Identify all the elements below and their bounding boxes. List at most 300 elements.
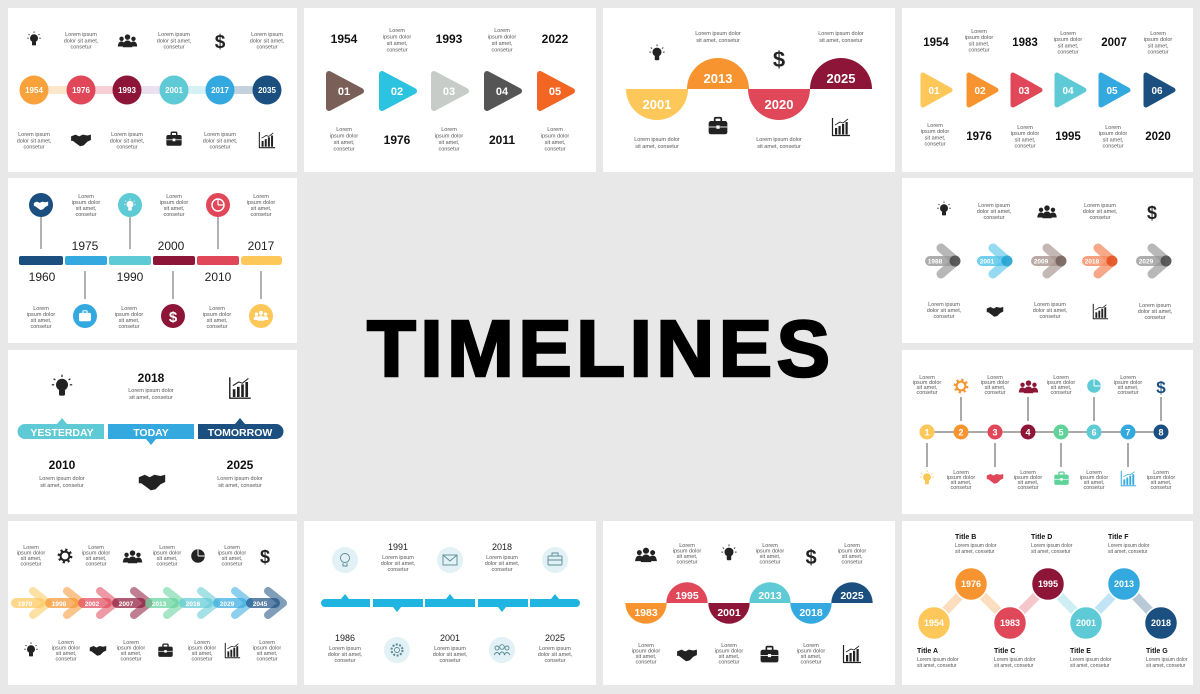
top texts: Lorem [844, 543, 860, 549]
bottom texts: consetur [1039, 314, 1061, 320]
panel: gray arrows 1988-2029: 2009 [1034, 258, 1049, 266]
years: 1954 [923, 37, 949, 49]
texts: sit amet, [207, 318, 228, 324]
bar labels: TODAY [133, 427, 169, 439]
panel: yesterday today tomorrow: 2018 [138, 371, 165, 385]
bottom titles: sit amet, consetur [917, 663, 957, 669]
texts: ipsum dolor [1054, 37, 1082, 43]
texts: sit amet, [1148, 43, 1169, 49]
bar [321, 594, 580, 612]
texts: Lorem ipsum dolor [695, 31, 741, 37]
top texts: consetur [916, 390, 938, 396]
year circles [20, 76, 282, 104]
circles: 2018 [1151, 618, 1171, 628]
panel: light blue line timeline: consetur [334, 658, 356, 664]
top texts: Lorem [679, 543, 695, 549]
top texts: ipsum dolor [82, 550, 110, 556]
texts [27, 194, 275, 330]
panel: chevron arrows 1970-2045: 2045 [253, 601, 268, 608]
texts: Lorem [33, 306, 49, 312]
circles: 1983 [1000, 618, 1020, 628]
texts: consetur [386, 48, 408, 54]
bottom texts: Lorem ipsum [111, 132, 143, 138]
top texts: Lorem ipsum [251, 32, 283, 38]
years: 1954 [331, 32, 358, 46]
texts: ipsum dolor [247, 200, 275, 206]
years: 2007 [1101, 37, 1127, 49]
panel: light blue line timeline [304, 521, 596, 685]
icon circles [332, 547, 568, 663]
texts: consetur [387, 567, 409, 573]
texts: ipsum dolor [330, 134, 358, 140]
panel: light blue line timeline: 1986 [335, 633, 355, 643]
bottom texts: consetur [23, 145, 45, 151]
texts: Lorem [971, 29, 987, 35]
arrows [33, 591, 283, 615]
years: 2020 [1145, 131, 1171, 143]
bottom texts: Lorem [58, 640, 74, 646]
bottom titles: Lorem ipsum dolor [1146, 657, 1188, 663]
texts: ipsum dolor [1144, 37, 1172, 43]
texts: Lorem [121, 306, 137, 312]
bottom titles: Lorem ipsum dolor [1070, 657, 1112, 663]
numbered circles: 5 [1058, 428, 1064, 438]
bottom texts: Lorem [1086, 470, 1102, 476]
bottom texts: dolor sit amet, [17, 138, 52, 144]
semicircles: 2020 [765, 97, 793, 112]
top texts: ipsum dolor [981, 380, 1009, 386]
panel: chevron arrows 1970-2045: 2016 [186, 601, 201, 608]
panel: chevron arrows 1970-2045: 2007 [119, 601, 134, 608]
year circles: 2035 [258, 86, 276, 95]
semicircles [625, 582, 873, 624]
panel: light blue line timeline: 2001 [440, 633, 460, 643]
panel: yesterday today tomorrow: 2025 [227, 458, 254, 472]
texts: Lorem [336, 127, 352, 133]
years [923, 37, 1171, 143]
circles: 2013 [1114, 579, 1134, 589]
bottom texts: consetur [635, 660, 657, 666]
top texts: sit amet, [1118, 385, 1139, 391]
bar labels: YESTERDAY [30, 427, 94, 439]
top texts: sit amet, [842, 554, 863, 560]
panel: yesterday today tomorrow: Lorem ipsum dolor [217, 476, 263, 482]
bottom texts: Lorem [123, 640, 139, 646]
top texts: consetur [1117, 390, 1139, 396]
bottom texts: consetur [1150, 485, 1172, 491]
texts: sit amet, consetur [696, 38, 740, 44]
top texts: consetur [20, 562, 42, 568]
bottom texts: dolor sit amet, [110, 138, 145, 144]
texts: sit amet, consetur [635, 144, 679, 150]
semicircles: 2013 [704, 71, 732, 86]
texts [921, 29, 1172, 150]
panel: triangles 01-05 [304, 8, 596, 172]
bottom texts [947, 470, 1175, 491]
panel: yesterday today tomorrow: Lorem ipsum dolor [128, 388, 174, 394]
bar segments [19, 256, 282, 265]
texts: sit amet, [387, 41, 408, 47]
texts: ipsum dolor [965, 35, 993, 41]
texts: sit amet, [492, 41, 513, 47]
bottom titles: Lorem ipsum dolor [994, 657, 1036, 663]
texts: sit amet, [76, 206, 97, 212]
bottom texts: Lorem [194, 640, 210, 646]
semicircles: 1995 [675, 590, 699, 602]
top texts: sit amet, [86, 556, 107, 562]
triangles: 03 [443, 86, 455, 98]
texts: Lorem [78, 194, 94, 200]
bottom titles: Title E [1070, 648, 1091, 655]
triangles [923, 75, 1173, 105]
semicircles: 2025 [827, 71, 855, 86]
texts: ipsum dolor [1011, 131, 1039, 137]
bottom titles: sit amet, consetur [994, 663, 1034, 669]
years: 1976 [966, 131, 992, 143]
texts [634, 31, 864, 150]
triangles: 05 [1106, 86, 1118, 97]
years: 2017 [248, 239, 275, 253]
texts: sit amet, consetur [757, 144, 801, 150]
top texts [913, 375, 1142, 396]
bottom texts: ipsum dolor [632, 648, 660, 654]
triangles: 03 [1018, 86, 1030, 97]
numbered circles: 7 [1125, 428, 1131, 438]
circles [918, 568, 1178, 640]
texts: ipsum dolor [383, 34, 411, 40]
bottom texts: sit amet, [1151, 480, 1172, 486]
texts: Lorem [1017, 125, 1033, 131]
top texts: ipsum dolor [756, 548, 784, 554]
top texts: Lorem [159, 545, 175, 551]
panel: yesterday today tomorrow: sit amet, consetur [218, 483, 262, 489]
top texts: consetur [163, 45, 185, 51]
bottom texts: consetur [933, 314, 955, 320]
semicircles: 2018 [799, 607, 823, 619]
top texts: Lorem ipsum [158, 32, 190, 38]
top texts: sit amet, [1051, 385, 1072, 391]
panel: wave 2001-2025 [603, 8, 895, 172]
numbered circles: 1 [924, 428, 930, 438]
top texts: sit amet, [21, 556, 42, 562]
connector bands [34, 86, 267, 94]
panel: gray arrows 1988-2029: 2001 [980, 258, 995, 266]
panel: chevron arrows 1970-2045: 2029 [220, 601, 235, 608]
texts: Lorem [494, 28, 510, 34]
top titles: Title B [955, 534, 976, 541]
bottom texts: ipsum dolor [1080, 475, 1108, 481]
texts [330, 28, 569, 152]
bottom icons [987, 304, 1108, 319]
texts: consetur [491, 567, 513, 573]
texts: ipsum dolor [921, 129, 949, 135]
bottom texts: ipsum dolor [947, 475, 975, 481]
connectors [927, 397, 1161, 467]
texts: sit amet, [925, 135, 946, 141]
bottom icons [24, 642, 240, 658]
top icons: $ [1147, 203, 1157, 223]
top texts: dolor sit amet, [64, 38, 99, 44]
bottom texts: sit amet, [121, 651, 142, 657]
bottom titles: Title C [994, 648, 1015, 655]
bottom texts: consetur [120, 656, 142, 662]
texts: consetur [924, 142, 946, 148]
panel: light blue line timeline: consetur [439, 658, 461, 664]
bottom texts: dolor sit amet, [927, 308, 962, 314]
panel: light blue line timeline: dolor sit amet, [433, 652, 468, 658]
top texts: ipsum dolor [913, 380, 941, 386]
texts: ipsum dolor [203, 312, 231, 318]
connectors [934, 584, 1161, 623]
years: 1990 [117, 270, 144, 284]
bottom icons [71, 132, 275, 148]
numbered circles: 8 [1158, 428, 1164, 438]
top icons: $ [215, 32, 226, 53]
bottom texts: Lorem [638, 643, 654, 649]
texts: dolor sit amet, [381, 561, 416, 567]
numbered circles: 4 [1025, 428, 1031, 438]
bottom titles: Lorem ipsum dolor [917, 657, 959, 663]
texts [381, 542, 520, 573]
top titles: Lorem ipsum dolor [1108, 543, 1150, 549]
semicircles: 1983 [634, 607, 658, 619]
bottom texts: sit amet, [951, 480, 972, 486]
top titles: Title F [1108, 534, 1129, 541]
texts: Lorem [253, 194, 269, 200]
top titles: sit amet, consetur [1031, 549, 1071, 555]
top texts: ipsum dolor [218, 550, 246, 556]
top icons: $ [260, 547, 270, 567]
texts: Lorem ipsum dolor [634, 137, 680, 143]
bottom texts: ipsum dolor [188, 646, 216, 652]
year circles: 1954 [25, 86, 43, 95]
panel: zigzag circles Title A-G [902, 521, 1193, 685]
top icons [59, 547, 270, 567]
top titles: sit amet, consetur [1108, 549, 1148, 555]
bottom texts: Lorem [1153, 470, 1169, 476]
texts: consetur [75, 212, 97, 218]
bottom texts: ipsum dolor [52, 646, 80, 652]
bar labels [18, 418, 284, 445]
years: 1995 [1055, 131, 1081, 143]
bottom texts: sit amet, [719, 654, 740, 660]
bottom items [39, 458, 85, 489]
texts: Lorem [441, 127, 457, 133]
top texts: Lorem [88, 545, 104, 551]
texts: ipsum dolor [115, 312, 143, 318]
bottom texts: ipsum dolor [1147, 475, 1175, 481]
year circles: 1993 [118, 86, 136, 95]
texts: Lorem ipsum dolor [756, 137, 802, 143]
semicircles: 2001 [717, 607, 741, 619]
texts: consetur [118, 324, 140, 330]
top texts: Lorem [762, 543, 778, 549]
top titles: Lorem ipsum dolor [955, 543, 997, 549]
semicircles: 2013 [758, 590, 782, 602]
texts: consetur [1147, 50, 1169, 56]
top texts: Lorem ipsum [65, 32, 97, 38]
top texts: consetur [984, 390, 1006, 396]
bottom texts: sit amet, [1018, 480, 1039, 486]
top icons [937, 201, 1157, 223]
numbered circles: 3 [992, 428, 998, 438]
panel: gray arrows 1988-2029: 1988 [928, 258, 943, 266]
top texts: consetur [256, 45, 278, 51]
top items [52, 375, 251, 398]
years: 1993 [436, 32, 463, 46]
panel: triangles 01-06 [902, 8, 1193, 172]
top texts: consetur [221, 562, 243, 568]
texts: Lorem [1105, 125, 1121, 131]
triangles: 01 [338, 86, 350, 98]
panel: light blue line timeline: 2025 [545, 633, 565, 643]
icon circles [29, 193, 273, 328]
texts: sit amet, consetur [819, 38, 863, 44]
top texts: consetur [85, 562, 107, 568]
numbered circles: 2 [958, 428, 964, 438]
top texts: sit amet, [157, 556, 178, 562]
texts: sit amet, [334, 140, 355, 146]
years [331, 32, 569, 147]
texts: consetur [1102, 144, 1124, 150]
top titles: Lorem ipsum dolor [1031, 543, 1073, 549]
bottom titles: sit amet, consetur [1146, 663, 1186, 669]
top texts: consetur [70, 45, 92, 51]
bottom texts: consetur [718, 660, 740, 666]
triangles: 02 [391, 86, 403, 98]
bottom icons [920, 470, 1136, 486]
triangles: 01 [928, 86, 940, 97]
panel: yesterday today tomorrow: sit amet, consetur [129, 395, 173, 401]
bottom texts: Lorem [721, 643, 737, 649]
texts: sit amet, [545, 140, 566, 146]
bottom texts: Lorem ipsum [18, 132, 50, 138]
texts: dolor sit amet, [485, 561, 520, 567]
bottom texts: consetur [55, 656, 77, 662]
panel: gray arrows 1988-2029 [902, 178, 1193, 343]
texts: sit amet, [164, 206, 185, 212]
bottom texts: Lorem [259, 640, 275, 646]
texts: consetur [968, 48, 990, 54]
top texts: consetur [676, 560, 698, 566]
top texts: consetur [1089, 215, 1111, 221]
texts: ipsum dolor [435, 134, 463, 140]
top texts: Lorem [1120, 375, 1136, 381]
bottom texts: Lorem ipsum [928, 302, 960, 308]
top texts: dolor sit amet, [977, 209, 1012, 215]
panel: wave 1983-2025 [603, 521, 895, 685]
panel: light blue line timeline: Lorem ipsum [434, 646, 466, 652]
panel: light blue line timeline: consetur [544, 658, 566, 664]
bottom texts: consetur [950, 485, 972, 491]
texts: consetur [30, 324, 52, 330]
circles: 1995 [1038, 579, 1058, 589]
bottom texts: sit amet, [192, 651, 213, 657]
panel: chevron arrows 1970-2045: 2013 [152, 601, 167, 608]
panel: light blue line timeline: dolor sit amet, [538, 652, 573, 658]
bottom texts: sit amet, [636, 654, 657, 660]
texts: Lorem ipsum [486, 555, 518, 561]
top texts [17, 545, 246, 568]
panel: gray arrows 1988-2029: 2029 [1139, 258, 1154, 266]
texts: consetur [250, 212, 272, 218]
texts: consetur [333, 146, 355, 152]
texts: ipsum dolor [1099, 131, 1127, 137]
bottom texts: sit amet, [1084, 480, 1105, 486]
texts: sit amet, [439, 140, 460, 146]
texts: Lorem ipsum [382, 555, 414, 561]
texts: consetur [163, 212, 185, 218]
top texts: sit amet, [677, 554, 698, 560]
bottom texts [927, 302, 1173, 321]
bottom texts: ipsum dolor [117, 646, 145, 652]
bottom texts: dolor sit amet, [1138, 309, 1173, 315]
texts: ipsum dolor [27, 312, 55, 318]
semicircles: 2025 [840, 590, 864, 602]
bottom items: 2010 [49, 458, 76, 472]
bottom texts: ipsum dolor [715, 648, 743, 654]
texts: Lorem [389, 28, 405, 34]
panel: chevron arrows 1970-2045: 1970 [18, 601, 33, 608]
panel: light blue line timeline: Lorem ipsum [329, 646, 361, 652]
bottom texts: ipsum dolor [1014, 475, 1042, 481]
top texts: dolor sit amet, [1083, 209, 1118, 215]
bottom texts: consetur [800, 660, 822, 666]
top texts: Lorem [987, 375, 1003, 381]
triangles: 04 [1062, 86, 1074, 97]
texts: ipsum dolor [160, 200, 188, 206]
texts: ipsum dolor [541, 134, 569, 140]
top texts: Lorem ipsum [1084, 203, 1116, 209]
bottom texts: sit amet, [801, 654, 822, 660]
triangles: 04 [496, 86, 509, 98]
year circles: 2017 [211, 86, 229, 95]
years: 1976 [384, 133, 411, 147]
top texts [673, 543, 866, 566]
top titles: Title D [1031, 534, 1052, 541]
texts: consetur [1057, 50, 1079, 56]
texts: consetur [1014, 144, 1036, 150]
triangles: 02 [974, 86, 986, 97]
years: 2022 [542, 32, 569, 46]
texts: Lorem [547, 127, 563, 133]
bottom texts: sit amet, [56, 651, 77, 657]
texts: Lorem [166, 194, 182, 200]
texts: 1991 [388, 542, 408, 552]
icons [649, 44, 850, 136]
bottom items: Lorem ipsum dolor [39, 476, 85, 482]
texts: sit amet, [31, 318, 52, 324]
top texts: ipsum dolor [838, 548, 866, 554]
texts: ipsum dolor [488, 34, 516, 40]
circles: 2001 [1076, 618, 1096, 628]
bottom texts: Lorem ipsum [1139, 303, 1171, 309]
bottom texts: consetur [209, 145, 231, 151]
texts: consetur [206, 324, 228, 330]
bottom icons [677, 645, 861, 662]
top icons [635, 544, 817, 569]
icons: $ [773, 47, 785, 72]
bottom titles: sit amet, consetur [1070, 663, 1110, 669]
top texts: Lorem ipsum [978, 203, 1010, 209]
bottom texts: ipsum dolor [253, 646, 281, 652]
panel: circle timeline 1954-2035 [8, 8, 297, 172]
top texts: Lorem [224, 545, 240, 551]
bottom texts: sit amet, [257, 651, 278, 657]
panel: numbered steps 1-8 [902, 350, 1193, 514]
circles: 1954 [924, 618, 944, 628]
texts: sit amet, [1058, 43, 1079, 49]
